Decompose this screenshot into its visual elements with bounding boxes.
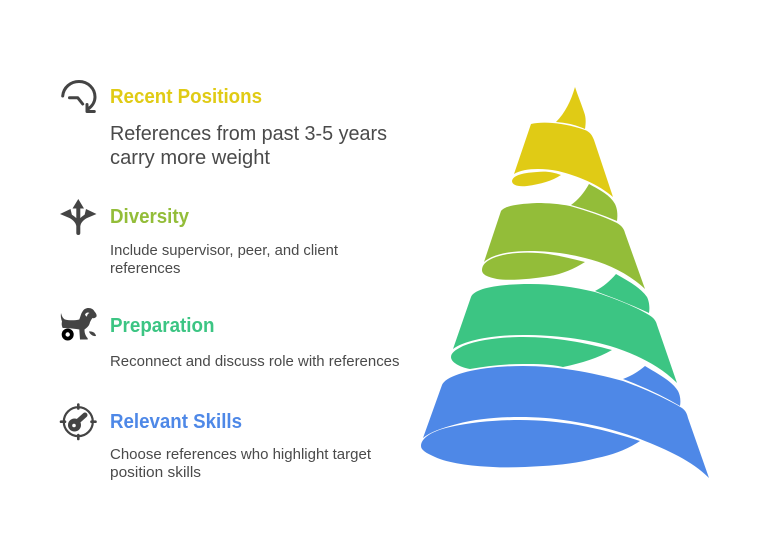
item: diversity bbox=[60, 199, 339, 277]
description bbox=[110, 446, 372, 481]
heading: Preparation bbox=[110, 315, 214, 337]
description: Choose references who highlight target bbox=[110, 446, 372, 463]
description: Reconnect and discuss role with references bbox=[110, 353, 400, 370]
icon: target with key bbox=[61, 404, 96, 439]
item: relevant skills bbox=[61, 404, 372, 481]
description bbox=[110, 122, 387, 169]
olive tier: diversity bbox=[482, 184, 645, 289]
yellow tier: recent positions bbox=[512, 87, 613, 197]
description: references bbox=[110, 260, 180, 277]
icon: rotating clock arrow bbox=[63, 82, 95, 112]
icon: three-way arrow bbox=[60, 199, 96, 233]
spiral cone chart bbox=[421, 87, 709, 478]
description: position skills bbox=[110, 464, 201, 481]
blue tier: relevant skills bbox=[421, 366, 709, 478]
heading: Relevant Skills bbox=[110, 411, 242, 433]
description: References from past 3-5 years bbox=[110, 122, 387, 145]
description bbox=[110, 242, 339, 277]
item: preparation bbox=[61, 308, 400, 370]
heading: Diversity bbox=[110, 206, 190, 228]
green tier: preparation bbox=[451, 274, 677, 383]
item: recent positions bbox=[63, 82, 387, 169]
description: carry more weight bbox=[110, 146, 270, 169]
icon: dog with wheel bbox=[61, 308, 97, 340]
description: Include supervisor, peer, and client bbox=[110, 242, 339, 259]
heading: Recent Positions bbox=[110, 86, 262, 108]
